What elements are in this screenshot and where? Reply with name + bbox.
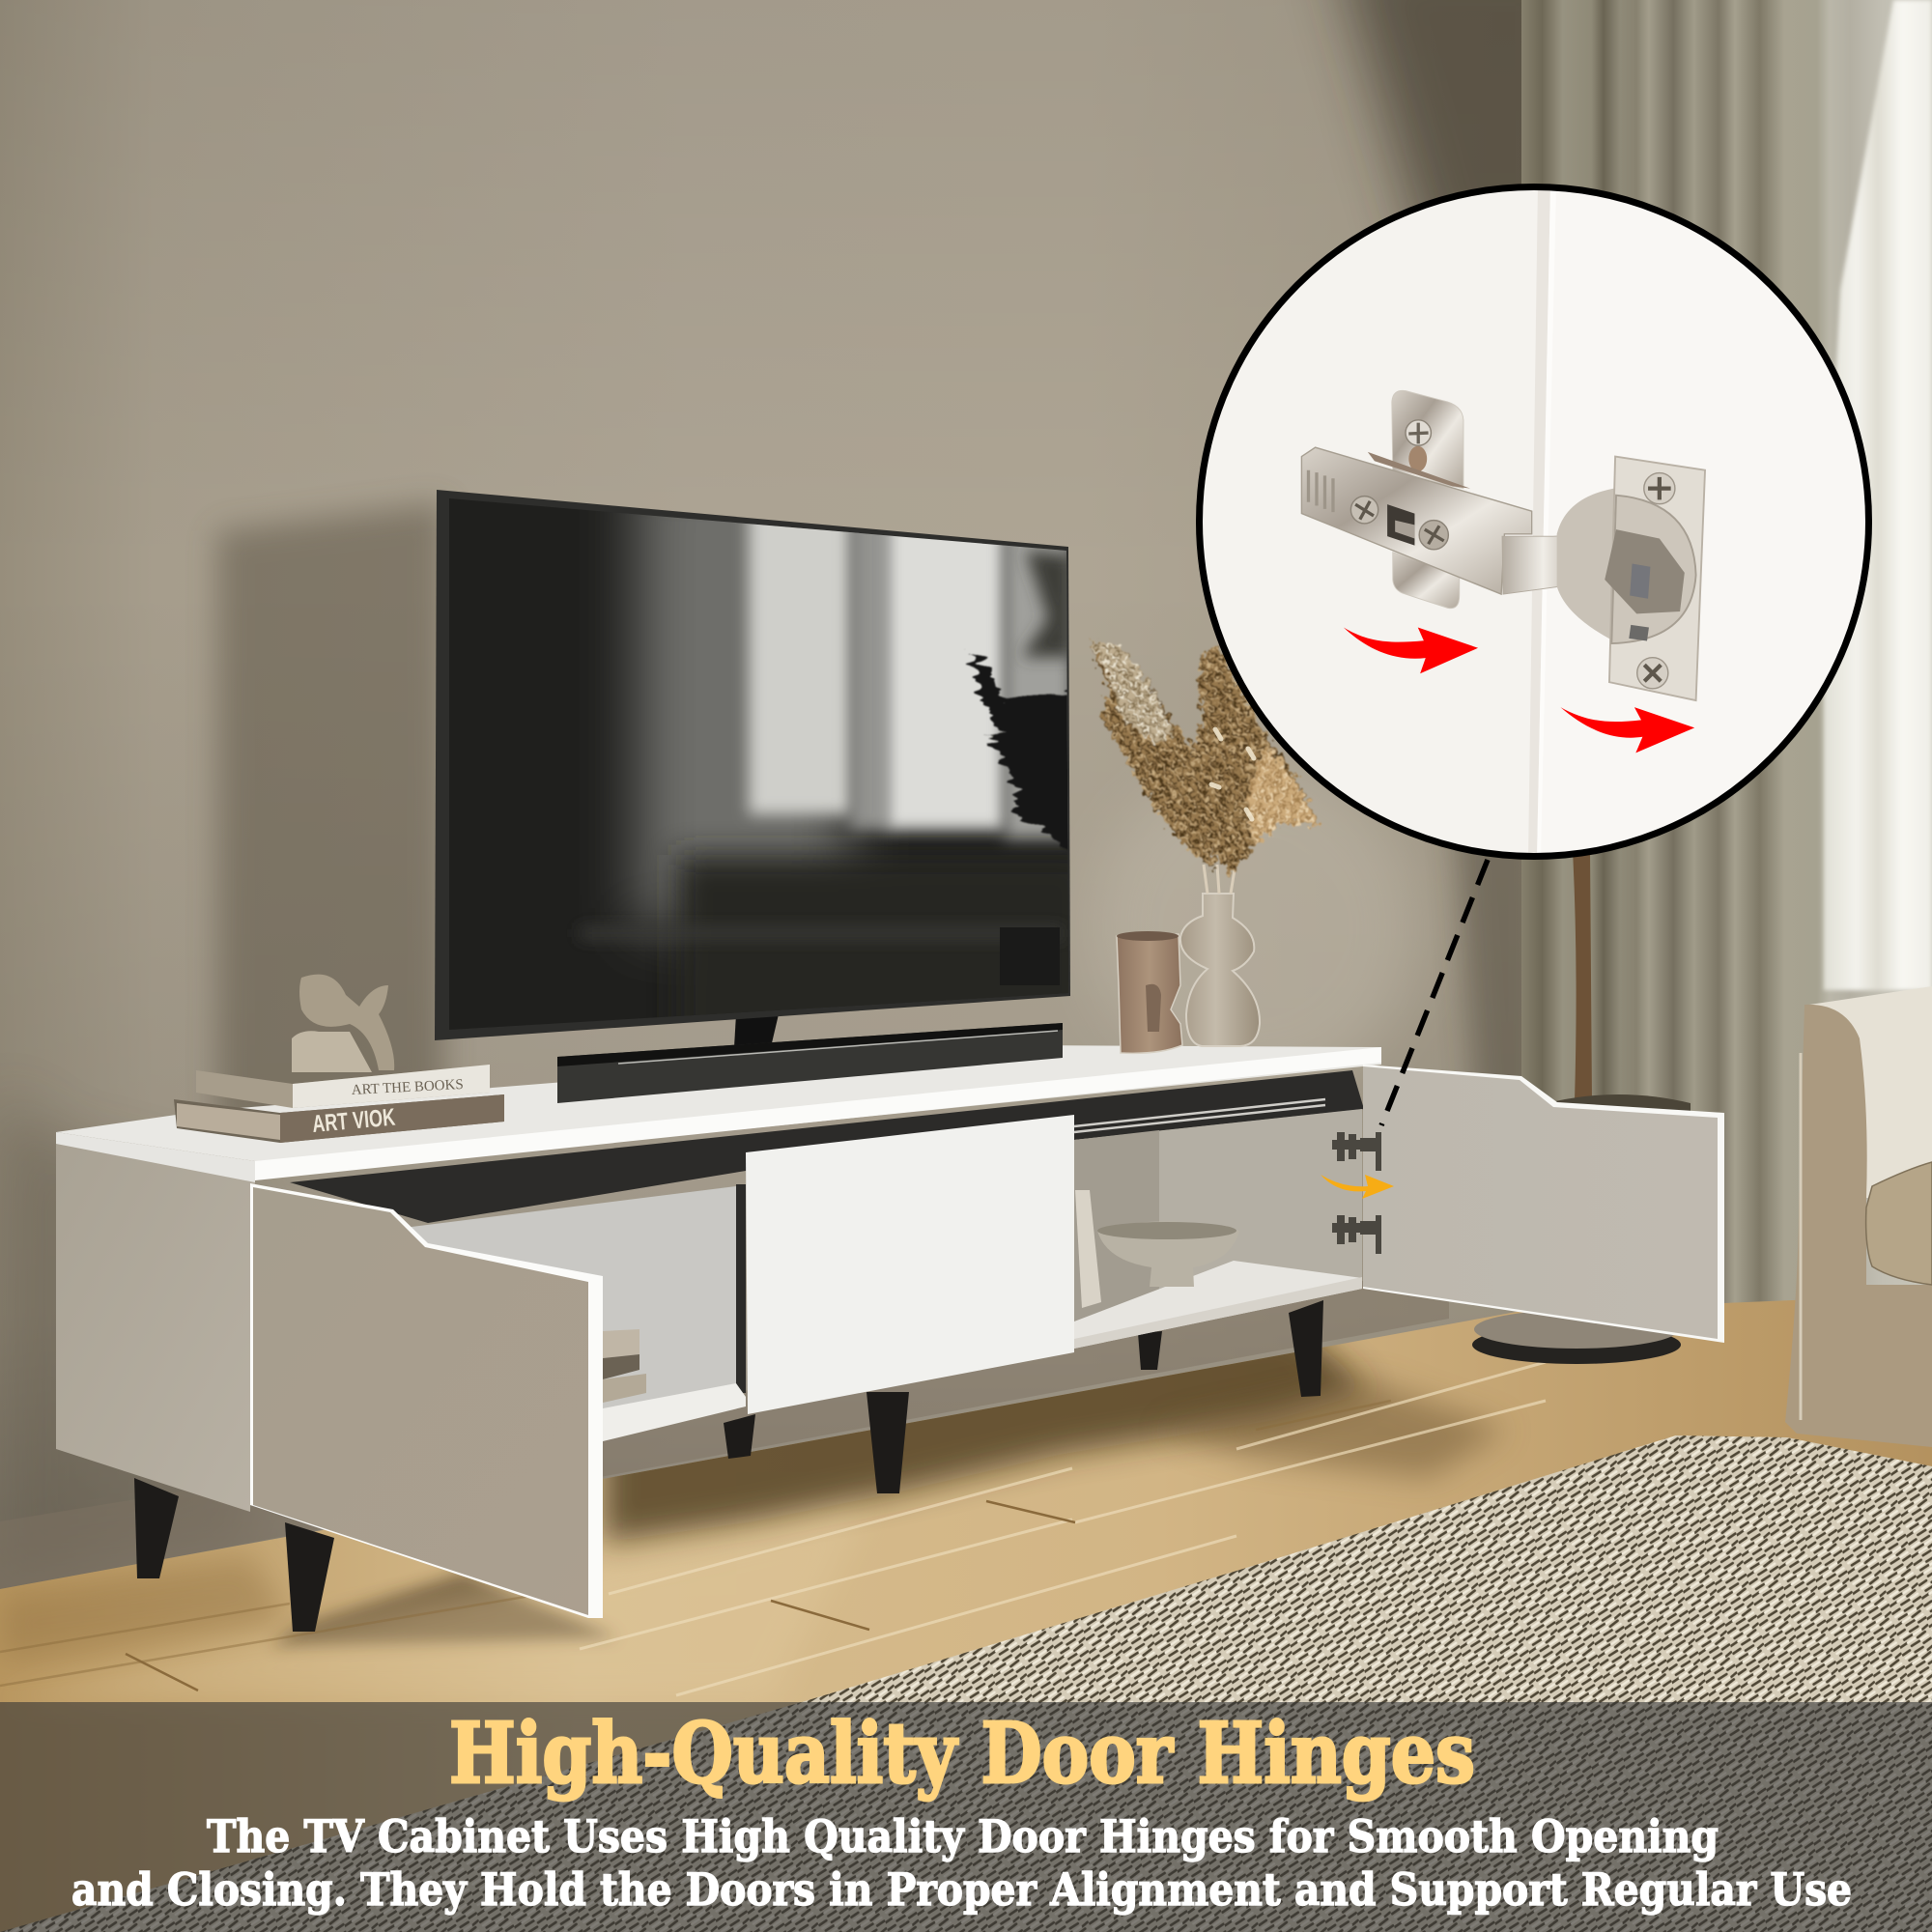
jute rug xyxy=(0,1435,1932,1932)
plank seams xyxy=(580,1362,1546,1695)
room background: wall xyxy=(0,0,1584,1642)
stacked books xyxy=(174,1065,504,1143)
hinge knuckle xyxy=(1502,534,1605,594)
door gap xyxy=(1540,184,1884,860)
wooden floor xyxy=(0,1294,1932,1932)
right interior compartment xyxy=(1074,1109,1362,1321)
hinge and red arrows xyxy=(1301,390,1705,753)
plume left xyxy=(1089,639,1215,869)
tv bezel xyxy=(435,490,1070,1040)
banner title: High-Quality Door Hinges xyxy=(449,1705,1475,1803)
right open door xyxy=(1363,1065,1724,1343)
television xyxy=(435,490,1070,1045)
left interior compartment xyxy=(396,1186,736,1410)
vase brown sculpture xyxy=(1117,931,1182,1053)
dashed connector line xyxy=(1381,860,1488,1125)
sculpture xyxy=(292,975,394,1072)
orange hinge arrow xyxy=(1321,1175,1394,1199)
book title upper: ART THE BOOKS xyxy=(351,1077,464,1098)
hinge mounting plate xyxy=(1392,390,1463,609)
plant pot rim xyxy=(1555,1094,1690,1111)
center closed door xyxy=(746,1115,1074,1414)
tv stand xyxy=(734,1014,779,1047)
ceramic bowl xyxy=(1097,1221,1239,1287)
reflected plant silhouette xyxy=(965,653,1068,850)
circular hinge callout xyxy=(1200,184,1884,860)
books in left compartment xyxy=(603,1329,646,1403)
small hinge lower xyxy=(1332,1215,1381,1254)
cabinet top surface xyxy=(56,1045,1381,1179)
TV cabinet xyxy=(56,1045,1724,1618)
left open door xyxy=(250,1183,603,1618)
floor plant pot base xyxy=(1472,1310,1681,1364)
plume right xyxy=(1188,645,1319,874)
door cup plate xyxy=(1557,457,1705,700)
floor shadows xyxy=(604,1323,1372,1543)
red arrow left xyxy=(1344,628,1478,673)
standing book xyxy=(1075,1190,1101,1308)
callout ring xyxy=(1200,187,1868,856)
vase white xyxy=(1180,894,1260,1046)
banner description xyxy=(71,1810,1852,1916)
left side panel xyxy=(56,1132,255,1512)
bottom text banner xyxy=(0,1702,1932,1932)
plant trunk xyxy=(1573,850,1592,1101)
armchair xyxy=(1785,986,1932,1447)
hinge arm xyxy=(1301,447,1532,594)
red arrow right xyxy=(1560,707,1694,753)
banner description: The TV Cabinet Uses High Quality Door Hinges for Smooth Opening xyxy=(207,1810,1719,1862)
seat cushion xyxy=(1866,1162,1932,1285)
dark rail under top xyxy=(290,1070,1364,1223)
tv screen with reflection xyxy=(449,498,1068,1030)
book title lower: ART VIOK xyxy=(311,1104,396,1138)
sheer window curtain xyxy=(1824,0,1932,990)
soundbar xyxy=(557,1023,1063,1103)
cabinet legs xyxy=(134,1300,1323,1632)
small hinge upper xyxy=(1332,1132,1381,1171)
curtain with pleats xyxy=(1521,0,1932,1310)
right shelf xyxy=(1074,1261,1362,1349)
left shelf xyxy=(603,1383,746,1441)
pampas grass xyxy=(1089,639,1319,894)
